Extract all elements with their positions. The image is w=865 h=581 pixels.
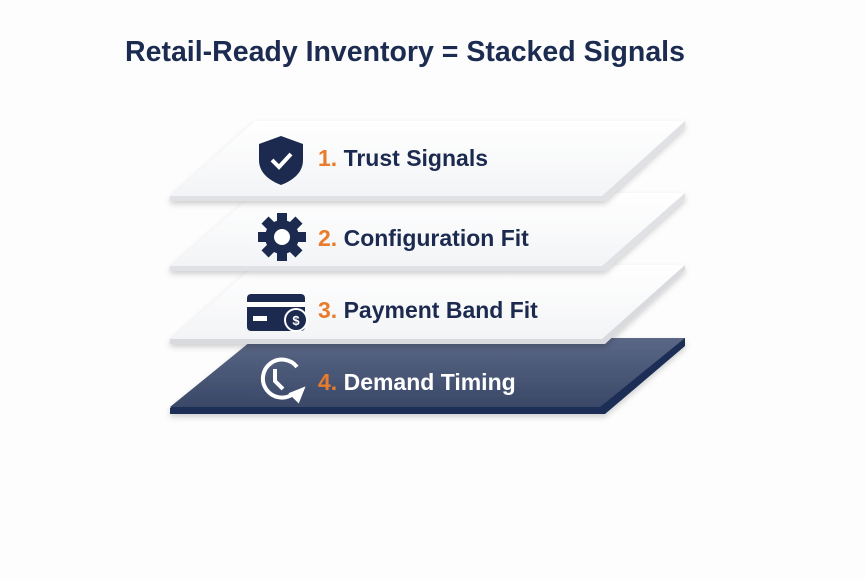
label 2: 2. Configuration Fit: [318, 225, 529, 251]
label 4: 4. Demand Timing: [318, 369, 516, 395]
icon: shield: [259, 136, 303, 185]
label 3: 3. Payment Band Fit: [318, 297, 538, 323]
layer 1: trust signals: [170, 121, 685, 201]
icon: gear: [258, 213, 306, 261]
icon: card: $: [292, 313, 300, 328]
layer 2: configuration fit: [170, 193, 685, 271]
icon: card: [247, 294, 307, 331]
layer 3: payment band fit: [170, 265, 685, 344]
label 1: 1. Trust Signals: [318, 145, 488, 171]
title: Retail-Ready Inventory = Stacked Signals: [125, 36, 685, 68]
icon: clock: [263, 360, 302, 400]
layer 4: demand timing: [170, 338, 685, 414]
